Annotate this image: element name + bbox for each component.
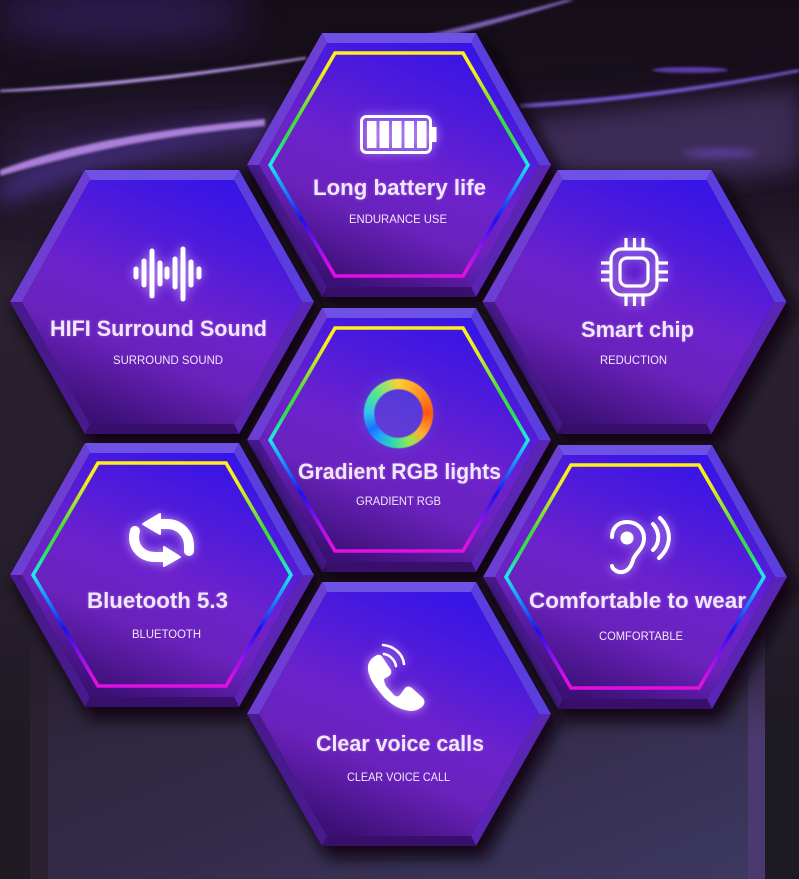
heading: Bluetooth 5.3 (87, 588, 228, 613)
icon: ear (612, 518, 669, 572)
icon glow: ring halo (362, 377, 434, 449)
subheading: ENDURANCE USE (349, 214, 447, 226)
panel: clear voice calls (247, 582, 561, 858)
subheading: BLUETOOTH (132, 629, 201, 641)
icon: phone (368, 645, 424, 711)
panel: hifi surround sound (10, 170, 324, 446)
icon: sound wave (136, 249, 199, 299)
subheading: SURROUND SOUND (113, 355, 223, 367)
icon: battery (362, 116, 436, 152)
panel: long battery life (247, 33, 561, 309)
panel: comfortable to wear (483, 445, 797, 721)
heading: HIFI Surround Sound (50, 316, 267, 341)
subheading: COMFORTABLE (599, 631, 683, 643)
heading: Long battery life (313, 175, 486, 200)
subheading: GRADIENT RGB (356, 496, 441, 508)
heading: Comfortable to wear (529, 588, 746, 613)
icon: bluetooth arrows (134, 514, 189, 566)
subheading: REDUCTION (600, 355, 667, 367)
heading: Gradient RGB lights (298, 459, 501, 484)
panel: bluetooth (10, 443, 324, 719)
subheading: CLEAR VOICE CALL (347, 772, 451, 784)
heading: Smart chip (581, 317, 694, 342)
panel: smart chip (482, 170, 796, 446)
icon: rgb ring (363, 378, 434, 449)
panel: gradient rgb lights (247, 308, 561, 584)
heading: Clear voice calls (316, 731, 484, 756)
icon: chip (601, 238, 668, 306)
